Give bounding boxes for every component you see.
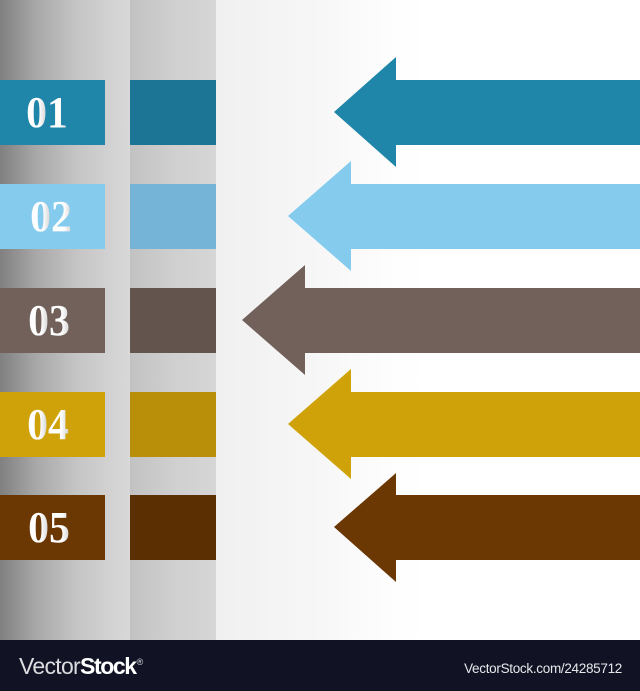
tab 05 xyxy=(130,495,216,560)
label 05 xyxy=(0,495,105,560)
footer bar xyxy=(0,640,640,691)
label 03 xyxy=(0,288,105,353)
label 05: 05 xyxy=(28,503,70,552)
background panel: middle grey fold xyxy=(130,0,216,640)
label 03: 03 xyxy=(28,296,70,345)
arrow 03 xyxy=(242,265,640,375)
label 01 xyxy=(0,80,105,145)
label 04: 04 xyxy=(27,400,69,449)
label 01: 01 xyxy=(26,88,68,137)
tab 03 xyxy=(130,288,216,353)
arrow 01 xyxy=(334,57,640,167)
background panel: left grey fold xyxy=(0,0,130,640)
tab 02 xyxy=(130,184,216,249)
footer url: VectorStock.com/24285712 xyxy=(464,661,622,676)
tab 04 xyxy=(130,392,216,457)
label 02 xyxy=(0,184,105,249)
arrow 05 xyxy=(334,473,640,582)
label 04 xyxy=(0,392,105,457)
footer logo: VectorStock® xyxy=(19,653,143,679)
label 02: 02 xyxy=(30,192,72,241)
arrow 02 xyxy=(288,161,640,271)
arrow 04 xyxy=(288,369,640,479)
background panel: right fading white xyxy=(216,0,640,640)
tab 01 xyxy=(130,80,216,145)
